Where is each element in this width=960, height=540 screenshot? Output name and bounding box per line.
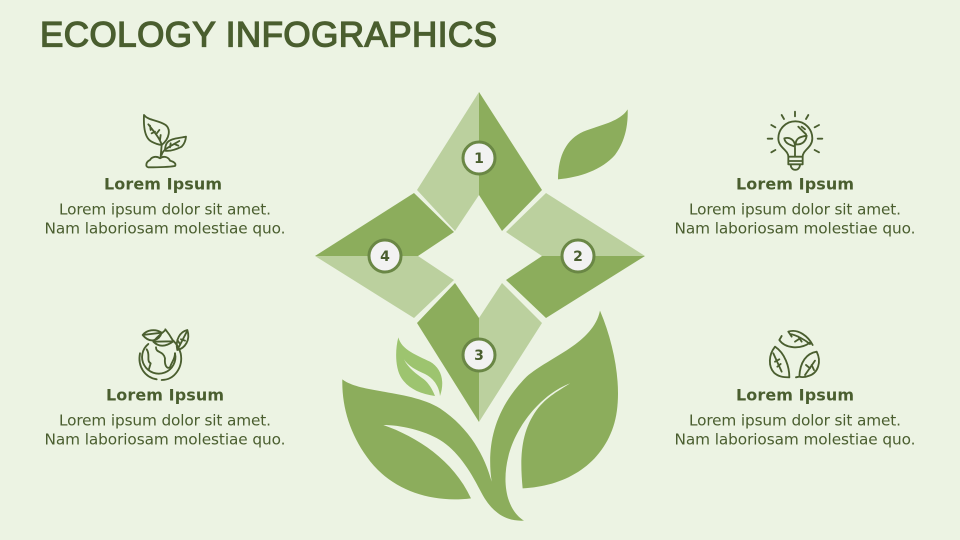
icon: recycling leaves: [770, 331, 819, 377]
text block: bottom-left: [44, 412, 286, 449]
number badge 4: 4: [380, 249, 390, 265]
text block: top-right: Lorem ipsum dolor sit amet.: [689, 201, 901, 219]
icon: floating leaf top right: [558, 109, 628, 179]
number badge 2: [562, 240, 594, 272]
panel: bottom-left text with globe icon: [44, 329, 286, 449]
segment 4: left: [315, 193, 454, 318]
text block: bottom-right: [674, 412, 916, 449]
panel: top-left text with sprout icon: [44, 115, 286, 238]
number badge 3: 3: [474, 348, 484, 364]
text block: top-left: [44, 201, 286, 238]
segment 1: top: [417, 92, 542, 231]
icon: large plant leaves: [342, 311, 618, 521]
number badge 2: 2: [573, 249, 583, 265]
number badge 3: [463, 339, 495, 371]
text block: top-right: [674, 201, 916, 238]
chart: four-part star diagram: [315, 92, 645, 422]
icon: globe with leaves: [139, 329, 188, 380]
text block: bottom-left: Lorem ipsum dolor sit amet.: [59, 412, 271, 430]
icon: sprout: [144, 115, 186, 167]
segment 3: bottom: [417, 283, 542, 422]
number badge 1: [463, 142, 495, 174]
panel: bottom-right text with recycling leaves icon: [674, 331, 916, 449]
text block: bottom-right: Nam laboriosam molestiae quo.: [674, 431, 916, 449]
heading: top-left: Lorem Ipsum: [104, 174, 222, 194]
heading: top-right: Lorem Ipsum: [736, 174, 854, 194]
panel: top-right text with light bulb icon: [674, 112, 916, 238]
number badge 4: [369, 240, 401, 272]
text block: top-left: Lorem ipsum dolor sit amet.: [59, 201, 271, 219]
text block: top-right: Nam laboriosam molestiae quo.: [674, 220, 916, 238]
heading: bottom-right: Lorem Ipsum: [736, 386, 854, 404]
number badge 1: 1: [474, 151, 484, 167]
icon: light bulb with sprout: [768, 112, 822, 170]
text block: bottom-left: Nam laboriosam molestiae quo.: [44, 431, 286, 449]
segment 2: right: [506, 193, 645, 318]
text block: top-left: Nam laboriosam molestiae quo.: [44, 220, 286, 238]
icon: small light leaf: [396, 337, 442, 396]
heading: bottom-left: Lorem Ipsum: [106, 386, 224, 404]
text block: bottom-right: Lorem ipsum dolor sit amet.: [689, 412, 901, 430]
title: ECOLOGY INFOGRAPHICS: [40, 16, 497, 54]
